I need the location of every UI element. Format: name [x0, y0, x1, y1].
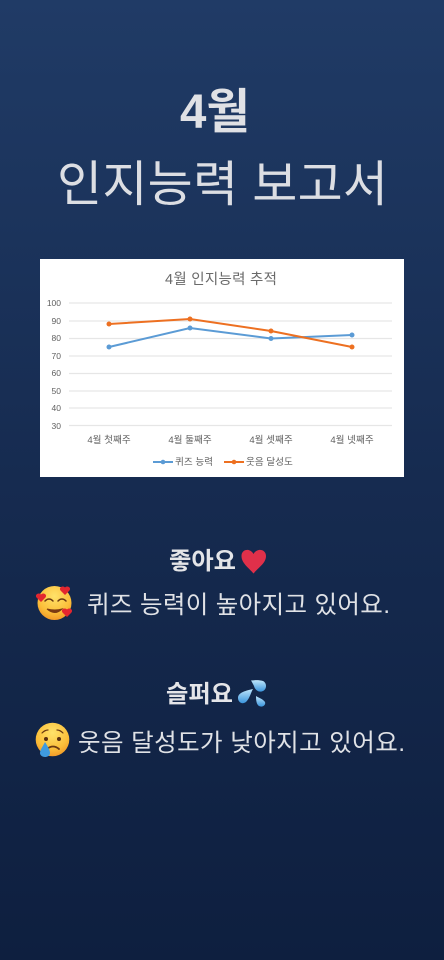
y axis labels: 80 — [52, 333, 61, 343]
panel: line chart — [40, 259, 404, 477]
y axis labels: 30 — [52, 421, 61, 431]
icon: crying face — [36, 723, 69, 757]
x axis labels: 4월 첫째주 — [87, 434, 131, 446]
legend — [153, 456, 293, 468]
heading: sad: 슬퍼요 — [166, 681, 233, 708]
x axis labels: 4월 넷째주 — [330, 434, 374, 446]
text: quiz ability rising: 퀴즈 능력이 높아지고 있어요. — [87, 591, 390, 619]
y axis labels: 50 — [52, 386, 61, 396]
y axis labels: 70 — [52, 351, 61, 361]
title: 4월 — [180, 86, 250, 139]
y axis labels: 90 — [52, 316, 61, 326]
text: laugh achievement falling: 웃음 달성도가 낮아지고 있어요. — [78, 729, 405, 757]
icon: sweat droplets — [238, 680, 266, 707]
icon: red heart — [242, 550, 266, 574]
chart title: 4월 인지능력 추적 — [165, 271, 277, 288]
x axis labels — [87, 434, 374, 446]
series: quiz ability — [106, 326, 354, 350]
y axis labels: 60 — [52, 368, 61, 378]
icon: smiling face with hearts — [36, 586, 72, 620]
legend: 퀴즈 능력 — [175, 456, 213, 468]
series: laugh achievement — [106, 316, 354, 350]
x axis labels: 4월 셋째주 — [249, 434, 293, 446]
y axis labels: 100 — [47, 298, 61, 308]
x axis labels: 4월 둘째주 — [168, 434, 212, 446]
y axis labels: 40 — [52, 403, 61, 413]
heading: good: 좋아요 — [169, 548, 236, 575]
title — [57, 86, 388, 212]
legend: 웃음 달성도 — [246, 456, 293, 468]
title: 인지능력 보고서 — [57, 158, 388, 212]
y axis labels — [47, 298, 61, 431]
